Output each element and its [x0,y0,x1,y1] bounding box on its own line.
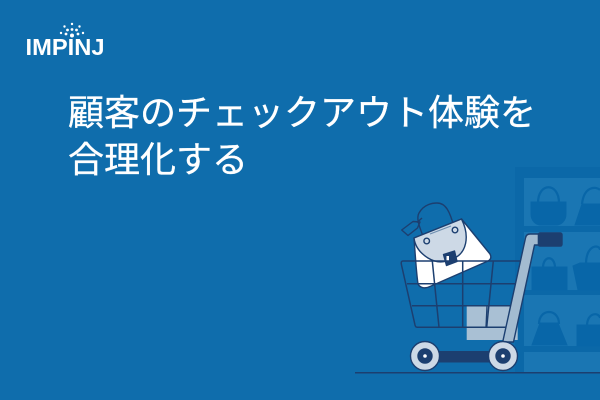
cart handle [503,232,563,342]
cart basket [401,261,520,327]
cart wheel left [410,342,440,370]
ground line [355,372,600,374]
title: 顧客のチェックアウト体験を [68,92,536,133]
logo wordmark: IMPINJ [26,34,104,60]
bag flap [414,219,466,262]
bag handle [418,203,454,240]
background shelf [515,167,600,373]
bag clasp [444,251,457,266]
cart axle [436,351,492,362]
title: 合理化する [68,139,248,180]
bag body [414,219,491,288]
shelf handbags [531,187,600,346]
price tag [402,222,420,236]
title [68,92,536,180]
box in cart [467,306,518,340]
logo dots [60,23,84,38]
handbag [402,203,491,288]
cart wheel right [488,342,518,370]
